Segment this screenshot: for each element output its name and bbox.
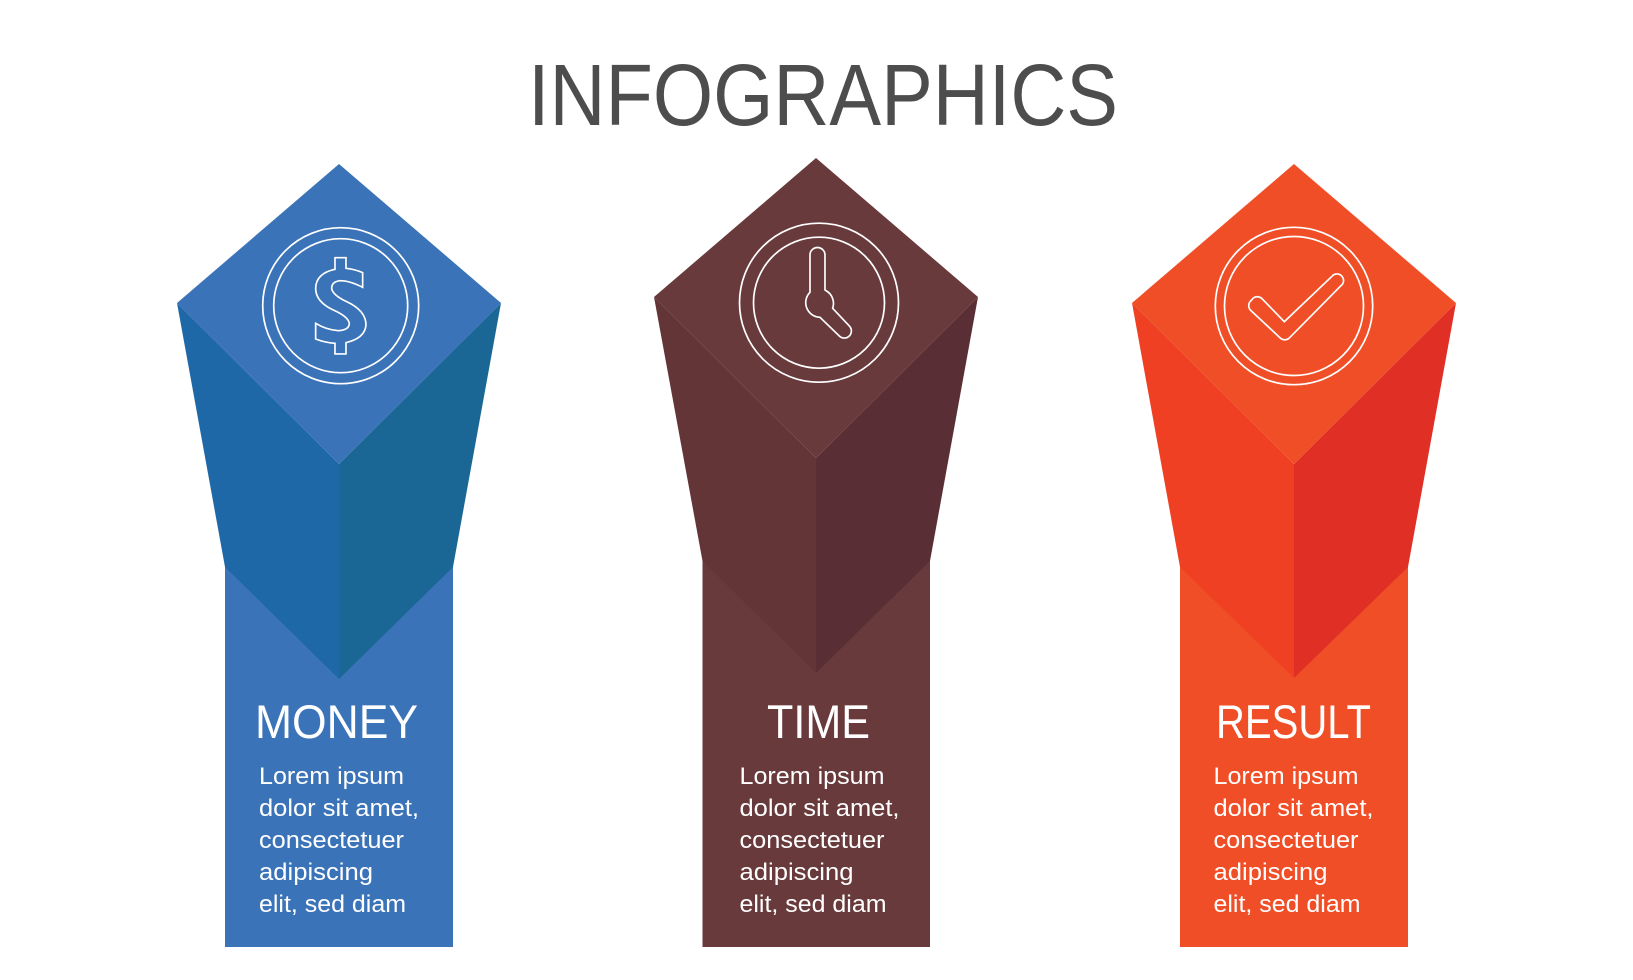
heading: result: RESULT (1216, 695, 1371, 748)
text block: money: consectetuer (259, 827, 404, 854)
text block: time: elit, sed diam (740, 891, 886, 918)
text block: money: dolor sit amet, (259, 795, 419, 822)
text block: money: elit, sed diam (259, 891, 406, 918)
right side face: time (816, 297, 978, 673)
panel base: money (225, 567, 453, 947)
top diamond face: time (654, 158, 978, 458)
text block: result: elit, sed diam (1214, 891, 1360, 918)
panel: money (177, 164, 501, 947)
panel: result (1132, 164, 1456, 947)
text block: time: dolor sit amet, (740, 795, 900, 822)
panel: time (654, 158, 978, 947)
text block: money: adipiscing (259, 859, 373, 886)
text block: money: Lorem ipsum (259, 763, 404, 790)
text block: time: Lorem ipsum (740, 763, 884, 790)
title: INFOGRAPHICS (528, 47, 1118, 144)
text block: result: dolor sit amet, (1214, 795, 1374, 822)
icon: clock (740, 223, 898, 382)
left side face: time (654, 297, 816, 673)
text block: result: adipiscing (1214, 859, 1328, 886)
text block: time: adipiscing (740, 859, 854, 886)
text block: result: consectetuer (1214, 827, 1358, 854)
text block: time: consectetuer (740, 827, 884, 854)
icon: dollar coin (263, 228, 419, 384)
top diamond face: result (1132, 164, 1456, 464)
text block: time (740, 763, 900, 918)
panel base: time (702, 561, 930, 947)
heading: time: TIME (767, 695, 870, 748)
text block: result: Lorem ipsum (1214, 763, 1358, 790)
text block: result (1214, 763, 1374, 918)
panel base: result (1180, 567, 1408, 947)
left side face: result (1132, 303, 1294, 678)
top diamond face: money (177, 164, 501, 464)
icon: check mark (1215, 227, 1373, 385)
left side face: money (177, 303, 339, 679)
right side face: money (339, 303, 501, 679)
right side face: result (1294, 303, 1456, 678)
heading: money: MONEY (255, 695, 418, 748)
text block: money (259, 763, 419, 918)
